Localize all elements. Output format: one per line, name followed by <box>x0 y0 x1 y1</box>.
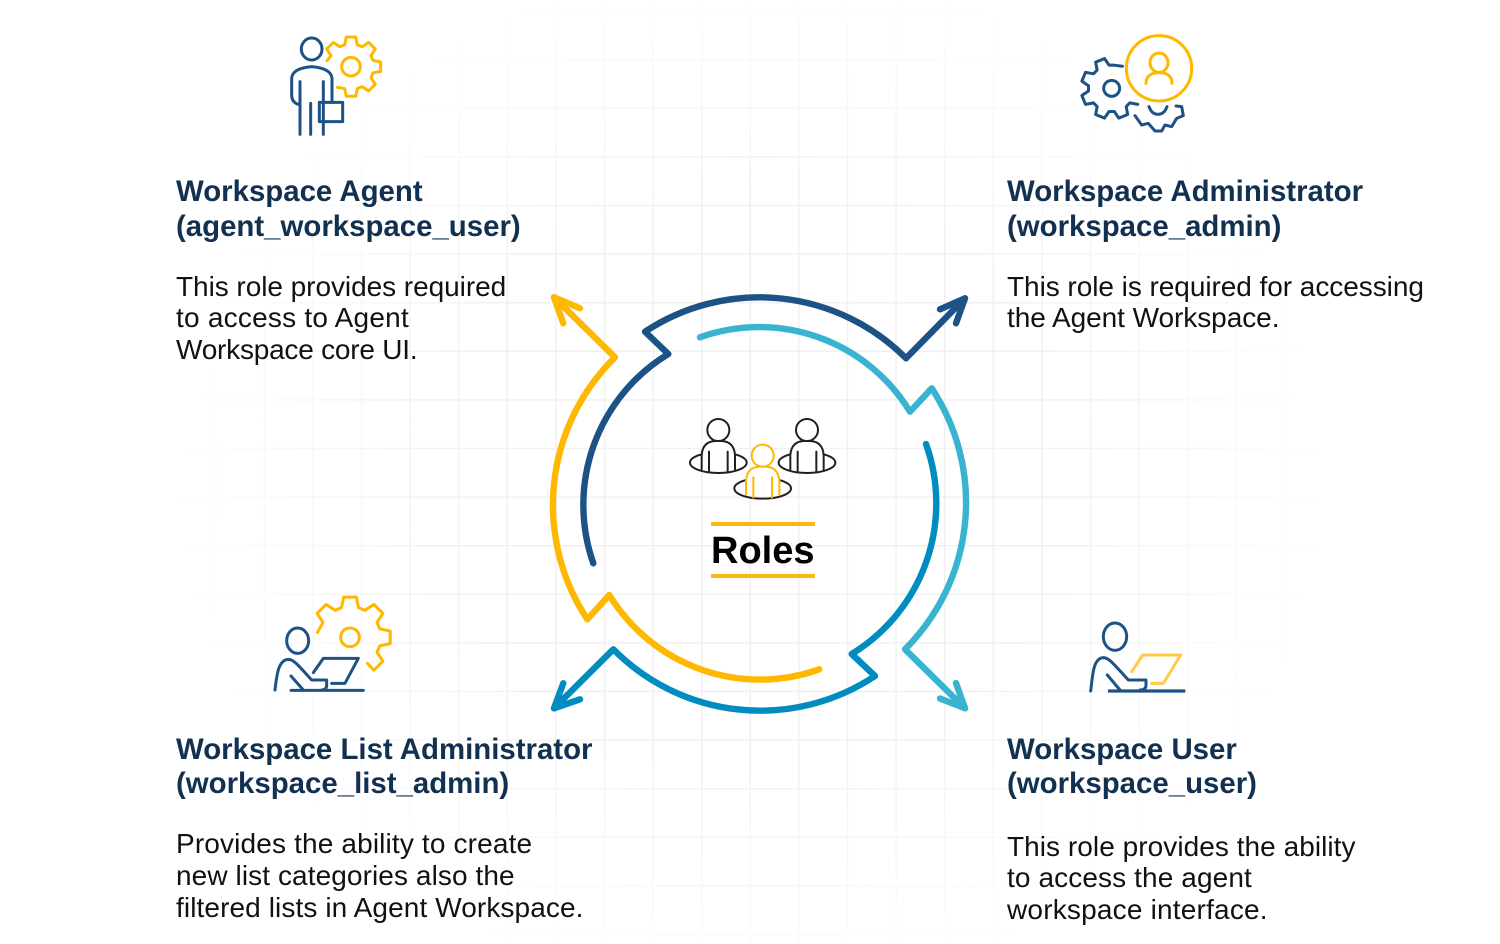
description: to access the agent <box>1007 862 1252 893</box>
icon: person at laptop with gear <box>274 596 392 692</box>
description <box>176 271 506 365</box>
panel: Workspace Agent <box>176 36 521 365</box>
heading: Workspace Agent <box>176 175 423 208</box>
description: workspace interface. <box>1007 894 1268 925</box>
icon: three people in holes <box>689 418 836 500</box>
arrow: teal to Workspace User <box>700 327 966 708</box>
arrow: yellow to Workspace Agent <box>553 297 819 680</box>
panel: Workspace List Administrator <box>176 596 592 923</box>
heading: (workspace_user) <box>1007 767 1257 800</box>
description: This role is required for accessing <box>1007 271 1424 302</box>
heading: Workspace User <box>1007 733 1237 766</box>
description: the Agent Workspace. <box>1007 302 1279 333</box>
heading <box>176 175 521 243</box>
icon: user in circle with gears <box>1080 34 1194 132</box>
description <box>1007 271 1424 333</box>
heading <box>1007 733 1257 800</box>
description: This role provides required <box>176 271 506 302</box>
heading <box>176 733 592 800</box>
description: Provides the ability to create <box>176 828 532 859</box>
central cycle diagram <box>550 294 970 714</box>
description <box>176 828 584 923</box>
heading: (workspace_list_admin) <box>176 767 509 800</box>
heading: Workspace Administrator <box>1007 175 1363 208</box>
heading: Workspace List Administrator <box>176 733 592 766</box>
person right <box>779 419 835 473</box>
description: Workspace core UI. <box>176 334 417 365</box>
centre title: Roles: Roles <box>711 530 814 572</box>
description: new list categories also the <box>176 860 515 891</box>
person centre <box>734 445 791 499</box>
arrow: blue to Workspace List Administrator <box>554 444 936 711</box>
panel: Workspace User <box>1007 622 1356 925</box>
heading: (workspace_admin) <box>1007 210 1281 243</box>
description: This role provides the ability <box>1007 831 1356 862</box>
arrow: dark blue to Workspace Administrator <box>583 297 965 563</box>
panel: Workspace Administrator <box>1007 34 1424 333</box>
heading <box>1007 175 1363 243</box>
description: filtered lists in Agent Workspace. <box>176 892 584 923</box>
person left <box>690 419 747 473</box>
icon: agent with briefcase and gear <box>290 36 382 136</box>
heading: (agent_workspace_user) <box>176 210 521 243</box>
icon: person at laptop <box>1089 622 1186 693</box>
description <box>1007 831 1356 925</box>
description: to access to Agent <box>176 302 409 333</box>
